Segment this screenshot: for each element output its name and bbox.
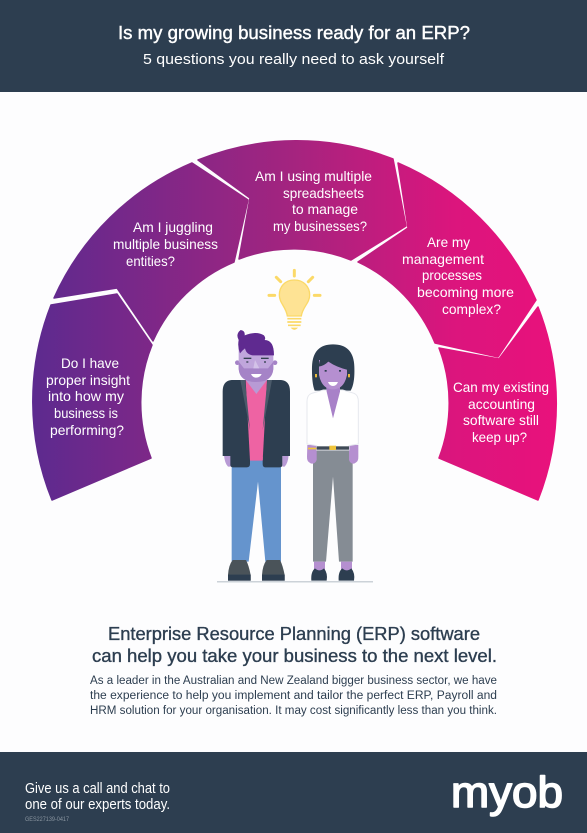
question 4 text: processes: [422, 267, 482, 283]
icon: light bulb: [269, 270, 320, 330]
question 1 text: into how my: [48, 388, 124, 404]
question 4 text: [402, 234, 514, 317]
question 3 text: to manage: [292, 201, 358, 217]
logo: myob: myob: [451, 768, 563, 817]
header banner: [0, 0, 587, 92]
document code: GES227139-0417: [25, 816, 69, 823]
question 2 text: [113, 219, 218, 269]
question 2 text: Am I juggling: [133, 219, 213, 235]
question 3 text: my businesses?: [273, 218, 367, 234]
call to action: [25, 780, 170, 813]
body paragraph: the experience to help you implement and tailor the perfect ERP, Payroll and: [90, 690, 497, 702]
question 5 text: keep up?: [472, 429, 527, 445]
woman hair back: [312, 344, 354, 391]
question 5 text: [453, 379, 549, 445]
question 2 text: multiple business: [113, 236, 218, 252]
man head: [235, 360, 240, 365]
main heading: can help you take your business to the next level.: [92, 646, 497, 666]
woman hands: [307, 445, 358, 464]
body paragraph: [90, 675, 497, 717]
segment 5 shape: [439, 307, 556, 500]
question 3 text: spreadsheets: [283, 185, 364, 201]
question 1 text: [46, 355, 130, 438]
main heading: Enterprise Resource Planning (ERP) software: [108, 624, 480, 644]
subtitle: 5 questions you really need to ask yourself: [143, 51, 445, 68]
segment 4 shape: [358, 163, 536, 357]
body paragraph: As a leader in the Australian and New Zealand bigger business sector, we have: [90, 675, 497, 687]
woman neck: [326, 385, 340, 418]
segment 3 shape: [198, 141, 406, 260]
question 5 text: software still: [463, 412, 539, 428]
man hands: [224, 455, 289, 467]
question 1 text: proper insight: [46, 372, 130, 388]
question 5 text: accounting: [468, 396, 535, 412]
call to action: one of our experts today.: [25, 796, 170, 813]
question 1 text: business is: [54, 405, 118, 421]
question 3 text: Am I using multiple: [255, 168, 372, 184]
question 1 text: Do I have: [61, 355, 119, 371]
floor line: [217, 581, 373, 582]
question 2 text: entities?: [126, 253, 175, 269]
woman fringe: [319, 348, 348, 370]
question 5 text: Can my existing: [453, 379, 549, 395]
woman blouse: [307, 390, 358, 450]
question 4 text: becoming more: [417, 284, 514, 300]
woman belt: [317, 446, 349, 450]
man shoes: [228, 560, 285, 581]
man hair: [237, 330, 274, 355]
title: Is my growing business ready for an ERP?: [118, 23, 470, 43]
body paragraph: HRM solution for your organisation. It may cost significantly less than you think.: [90, 705, 497, 717]
question 4 text: complex?: [442, 301, 501, 317]
woman face: [319, 360, 347, 389]
illustration: woman: [307, 344, 358, 581]
question 4 text: management: [402, 251, 484, 267]
question 3 text: [255, 168, 372, 234]
man beard: [239, 362, 273, 382]
footer banner: [0, 752, 587, 833]
man jeans: [232, 460, 281, 562]
segment 2 shape: [54, 163, 248, 341]
question arc: [33, 141, 556, 500]
woman ankles: [314, 562, 352, 571]
woman shoes: [311, 568, 354, 581]
question 1 text: performing?: [50, 422, 124, 438]
woman pants: [313, 448, 353, 562]
man lapels: [240, 380, 272, 430]
segment 1 shape: [33, 294, 152, 500]
man jacket: [223, 380, 290, 467]
main heading: [92, 624, 497, 666]
man shirt: [246, 380, 267, 461]
call to action: Give us a call and chat to: [25, 780, 170, 797]
question 4 text: Are my: [427, 234, 470, 250]
illustration: man: [223, 330, 290, 581]
